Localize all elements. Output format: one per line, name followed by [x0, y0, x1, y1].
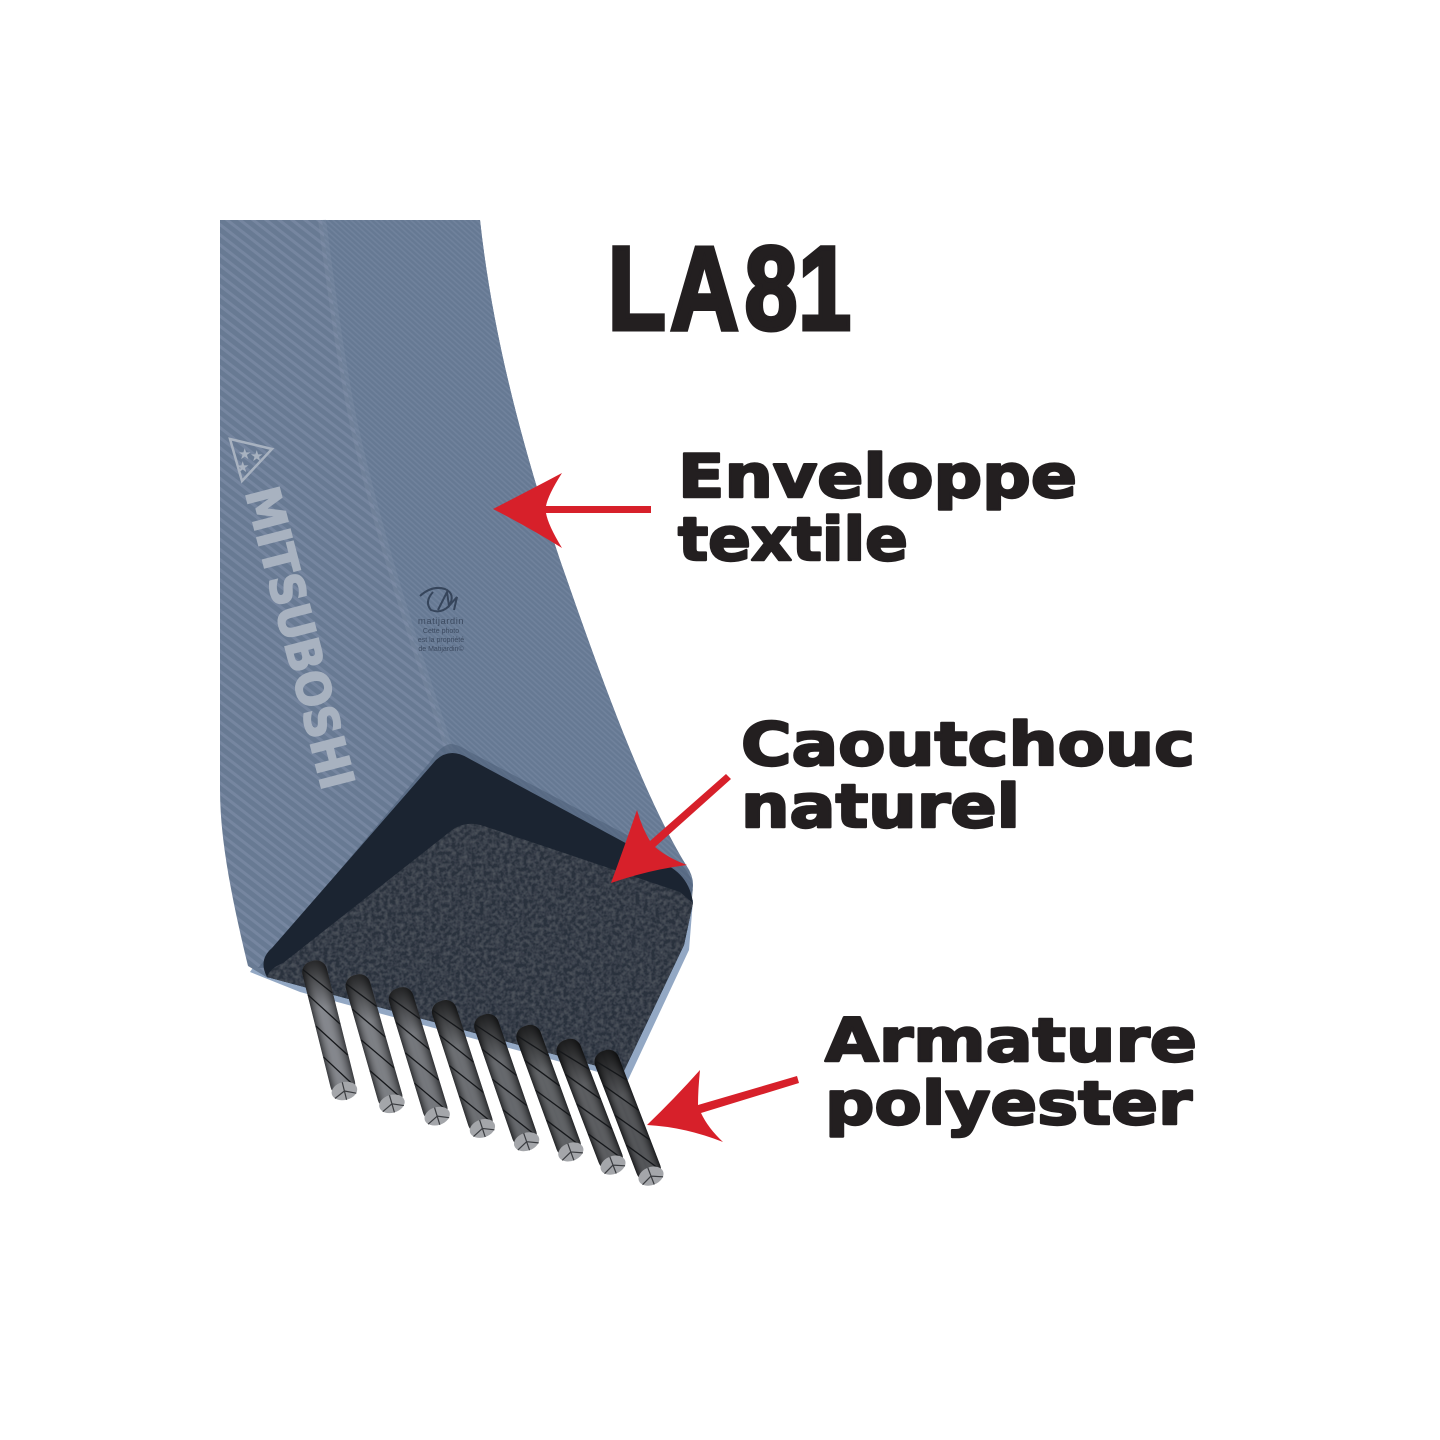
belt illustration — [220, 220, 693, 1189]
label: Caoutchouc naturel — [741, 710, 1195, 842]
cable 4 — [429, 997, 498, 1141]
arrow: to textile envelope — [493, 473, 651, 548]
brand logo: triangle with stars: ★ — [250, 447, 263, 465]
polyester cables — [299, 958, 666, 1189]
cable 7 — [553, 1035, 628, 1178]
arrow: to natural rubber — [611, 774, 731, 883]
watermark: Matijardin: est la propriété — [418, 637, 464, 644]
label: Armature polyester: Armature — [825, 1006, 1197, 1076]
brand name MITSUBOSHI: MITSUBOSHI — [233, 481, 364, 795]
cable 6 — [513, 1022, 586, 1165]
cable 8 — [591, 1046, 666, 1189]
cable 3 — [386, 984, 452, 1129]
watermark: Matijardin: Cette photo — [423, 628, 459, 635]
cable 5 — [471, 1011, 542, 1154]
rubber core, dark side — [263, 753, 693, 1073]
brand logo: triangle with stars: ★ — [238, 445, 251, 463]
ridge highlight — [322, 220, 450, 752]
title: LA81 — [608, 222, 851, 354]
cable 1 — [299, 958, 359, 1103]
label: Armature polyester: polyester — [825, 1069, 1192, 1139]
label: Enveloppe textile: Enveloppe — [678, 442, 1077, 512]
watermark: Matijardin: matijardin — [418, 616, 464, 627]
label: Armature polyester — [825, 1006, 1197, 1139]
watermark: Matijardin: de Matijardin© — [418, 645, 464, 653]
cable 2 — [343, 971, 407, 1116]
belt lower light edge — [250, 900, 693, 1080]
rubber core, leather face — [267, 824, 693, 1073]
brand logo: triangle with stars — [230, 439, 272, 481]
label: Enveloppe textile: textile — [678, 505, 908, 575]
label: Caoutchouc naturel: Caoutchouc — [741, 710, 1195, 780]
label: Caoutchouc naturel: naturel — [741, 772, 1020, 842]
arrow: to polyester cords — [647, 1070, 799, 1142]
label: Enveloppe textile — [678, 442, 1077, 575]
watermark: Matijardin — [418, 588, 464, 653]
belt textile envelope, left panel — [220, 220, 693, 978]
belt textile envelope, right panel — [322, 220, 693, 905]
watermark icon — [420, 588, 457, 611]
halo around rubber — [258, 744, 693, 968]
brand logo: triangle with stars: ★ — [236, 458, 249, 476]
